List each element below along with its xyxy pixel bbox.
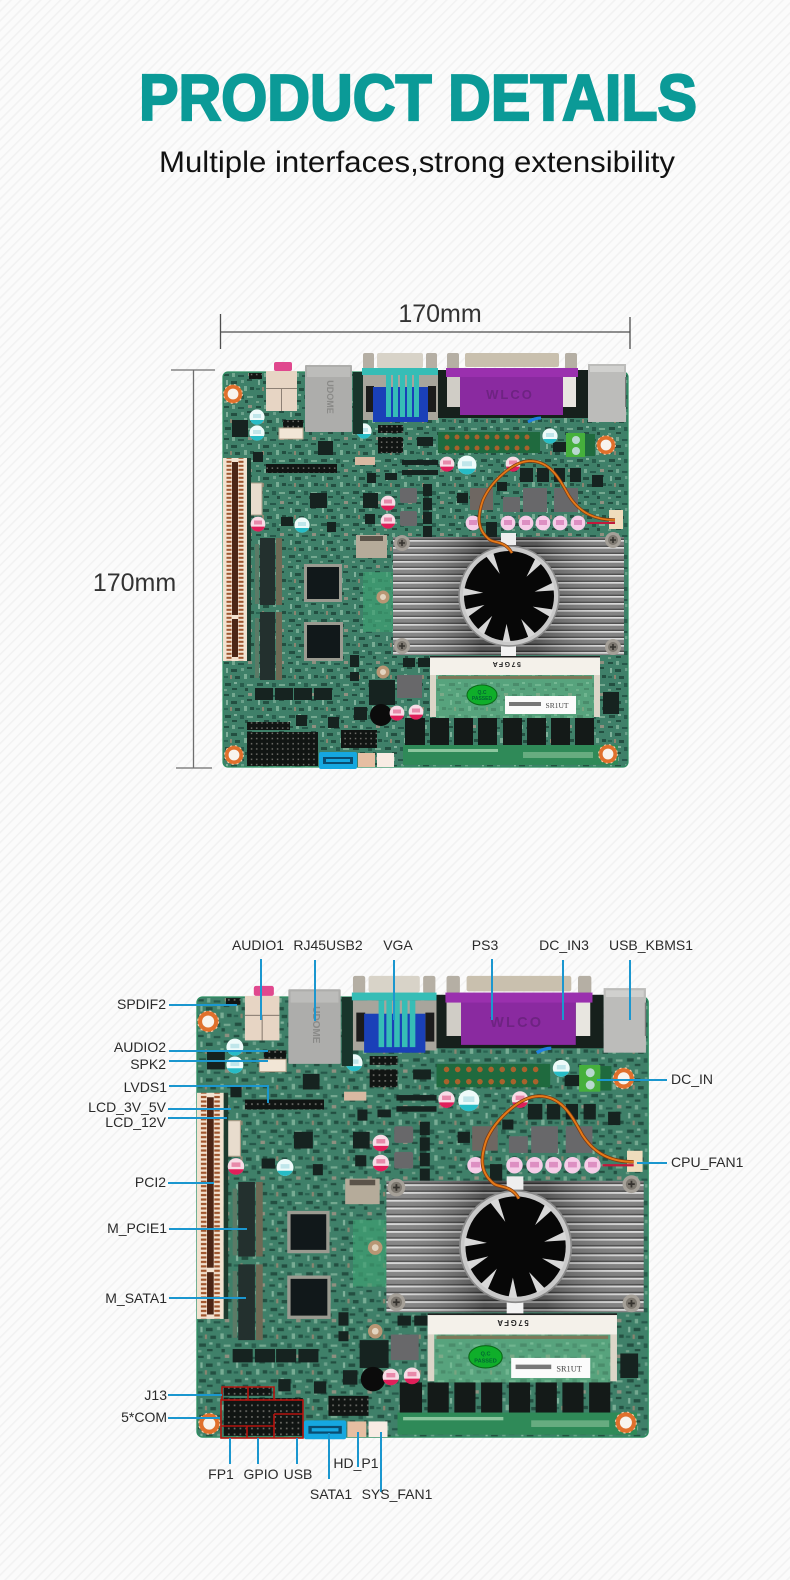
interface labels: top row bbox=[232, 937, 693, 953]
height dimension: 170mm: 170mm bbox=[93, 569, 176, 597]
motherboard photo: dimensions view bbox=[223, 353, 628, 769]
interface labels: left column: M_PCIE1 bbox=[107, 1220, 167, 1236]
interface labels: bottom row: FP1 bbox=[208, 1466, 234, 1482]
interface labels: left column: LCD_12V bbox=[105, 1114, 167, 1130]
red header outlines bbox=[221, 1387, 303, 1438]
interface labels: bottom row: SYS_FAN1 bbox=[362, 1486, 433, 1502]
interface labels: left column: LCD_3V_5V bbox=[88, 1099, 167, 1115]
height dimension: 170mm bbox=[93, 370, 215, 768]
interface labels: bottom row: SATA1 bbox=[310, 1486, 352, 1502]
interface labels: top row: VGA bbox=[383, 937, 413, 953]
width dimension: 170mm bbox=[220, 300, 630, 349]
interface labels: bottom row: HD_P1 bbox=[333, 1455, 379, 1471]
title: PRODUCT DETAILS bbox=[139, 61, 697, 134]
subtitle: Multiple interfaces,strong extensibility bbox=[159, 146, 675, 179]
interface labels: left column: PCI2 bbox=[135, 1174, 166, 1190]
interface labels: left column bbox=[88, 996, 167, 1425]
interface labels: left column: SPDIF2 bbox=[117, 996, 166, 1012]
interface labels: left column: J13 bbox=[144, 1387, 167, 1403]
interface labels: left column: LVDS1 bbox=[124, 1079, 167, 1095]
interface labels: left column: M_SATA1 bbox=[105, 1290, 167, 1306]
interface labels: right column: DC_IN bbox=[671, 1071, 713, 1087]
interface labels: bottom row: USB bbox=[284, 1466, 312, 1482]
interface labels: top row: USB_KBMS1 bbox=[609, 937, 693, 953]
interface labels: bottom row bbox=[208, 1455, 433, 1502]
interface labels: bottom row: GPIO bbox=[243, 1466, 279, 1482]
interface labels: left column: SPK2 bbox=[130, 1056, 166, 1072]
interface labels: top row: DC_IN3 bbox=[539, 937, 589, 953]
motherboard photo: interface view bbox=[197, 976, 648, 1439]
interface labels: right column: CPU_FAN1 bbox=[671, 1154, 744, 1170]
interface labels: left column: AUDIO2 bbox=[114, 1039, 166, 1055]
interface labels: top row: PS3 bbox=[472, 937, 498, 953]
leader lines bbox=[168, 959, 667, 1492]
interface labels: left column: 5*COM bbox=[121, 1409, 167, 1425]
width dimension: 170mm: 170mm bbox=[398, 300, 482, 328]
interface labels: top row: RJ45USB2 bbox=[293, 937, 363, 953]
interface labels: top row: AUDIO1 bbox=[232, 937, 284, 953]
interface labels: right column bbox=[671, 1071, 744, 1170]
